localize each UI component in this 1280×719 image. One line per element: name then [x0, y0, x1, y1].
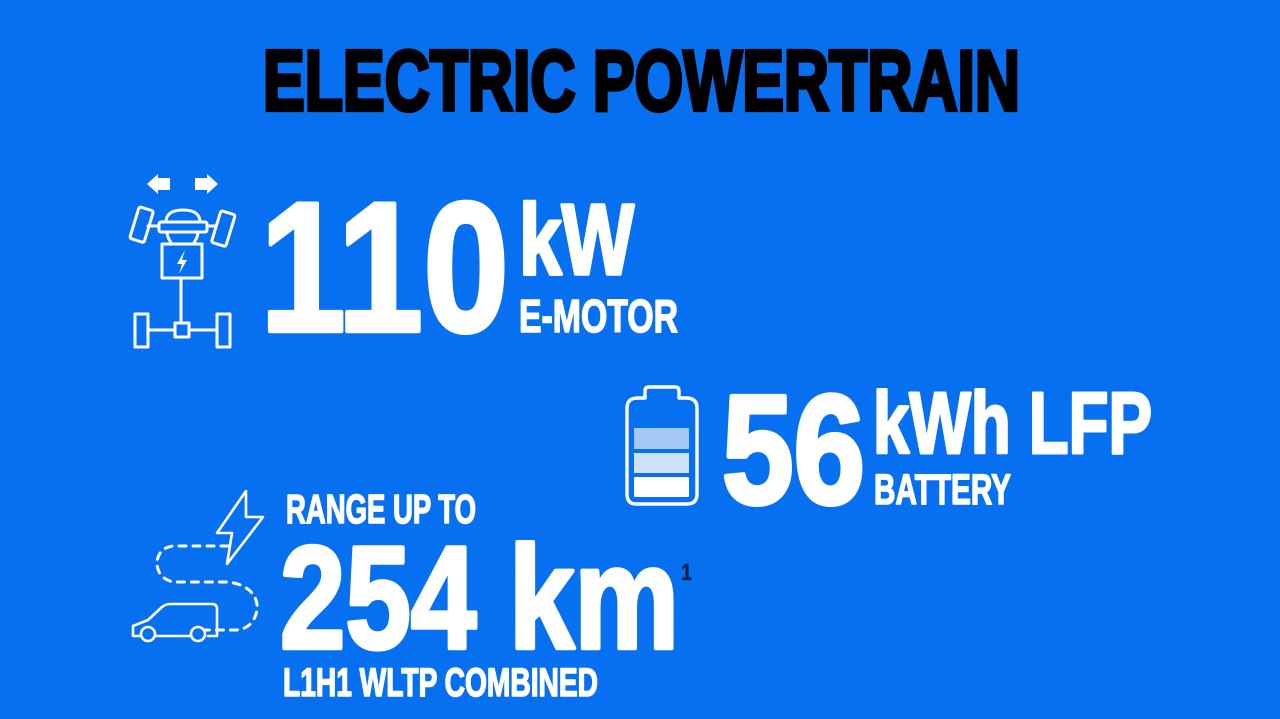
value: 254 km: 254 km	[280, 516, 679, 679]
heading: range up to: RANGE UP TO	[286, 486, 476, 532]
unit: kWh LFP: kWh LFP	[873, 375, 1152, 472]
panel: battery	[627, 363, 1152, 536]
unit: kW: kW	[519, 184, 634, 296]
value: 110: 110	[260, 165, 509, 371]
label: e-motor: E-MOTOR	[519, 290, 678, 342]
label: l1h1 wltp combined: L1H1 WLTP COMBINED	[283, 661, 598, 705]
icon: van route with lightning bolt	[133, 491, 263, 641]
panel: range	[133, 486, 692, 705]
panel: e-motor	[130, 165, 678, 371]
icon: battery	[627, 387, 697, 504]
title: ELECTRIC POWERTRAIN	[263, 34, 1020, 129]
label: battery: BATTERY	[874, 466, 1011, 514]
footnote marker: 1	[681, 559, 692, 585]
icon: drivetrain	[130, 174, 235, 347]
value: 56: 56	[722, 363, 865, 536]
